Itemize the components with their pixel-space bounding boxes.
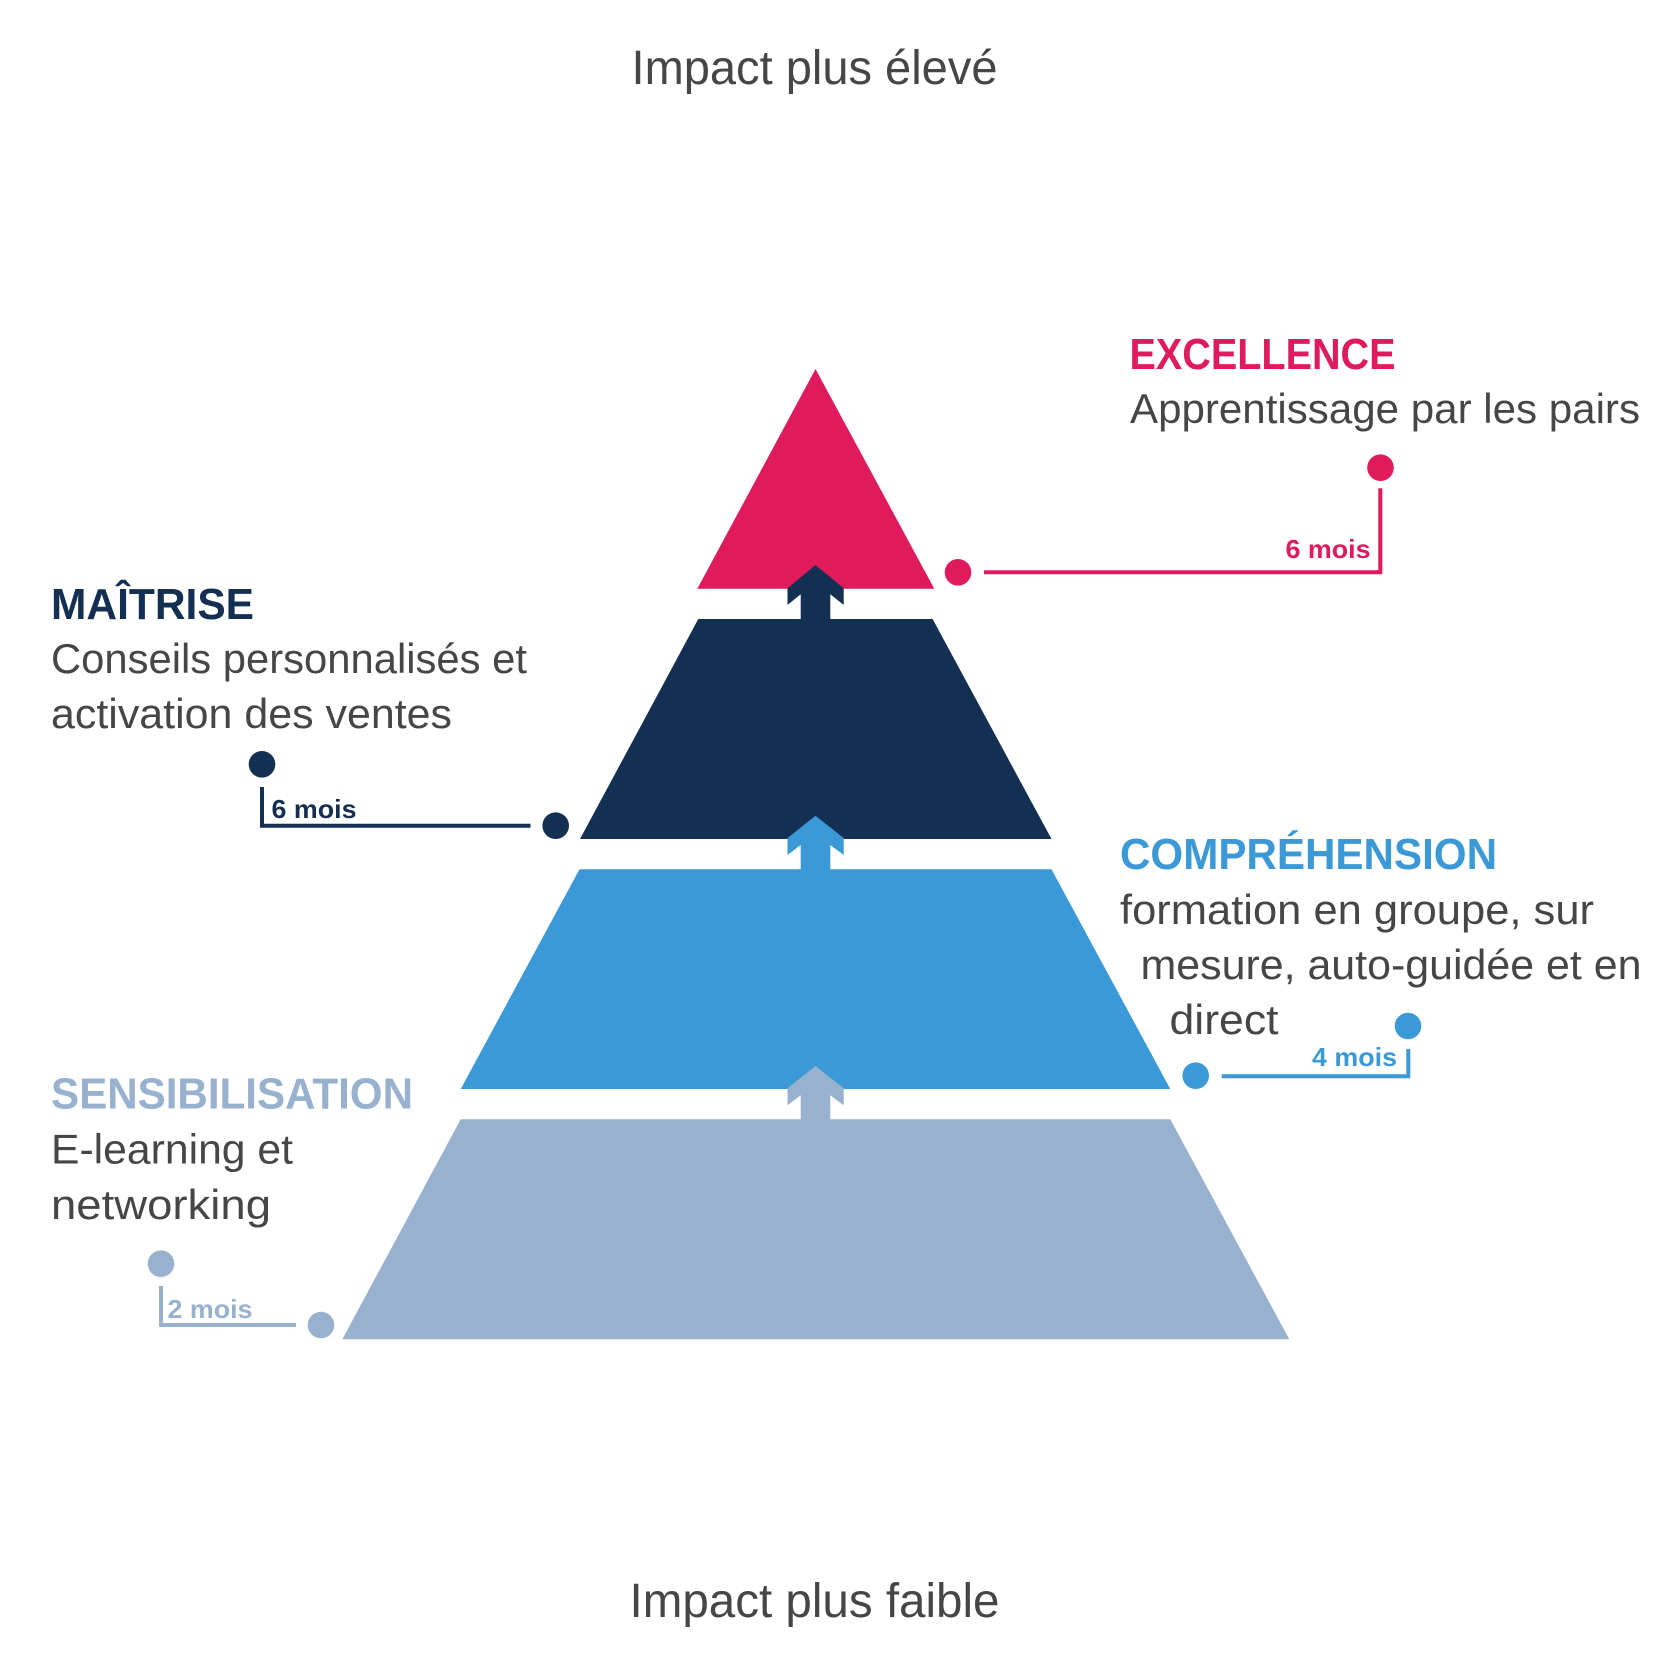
heading: lower impact: Impact plus faible [630, 1575, 1000, 1628]
heading: higher impact: Impact plus élevé [632, 42, 998, 95]
panel: compréhension [1120, 829, 1642, 1089]
text: compréhension description [1120, 886, 1642, 1043]
timeline: compréhension 4 mois [1182, 1013, 1421, 1089]
timeline: compréhension 4 mois: 4 mois [1312, 1042, 1397, 1072]
arrow: light blue [788, 1066, 844, 1120]
text: maîtrise description: Conseils personnalisés et [51, 635, 527, 682]
heading: excellence: EXCELLENCE [1130, 330, 1396, 379]
pyramid [342, 369, 1289, 1339]
text: maîtrise description: activation des ventes [51, 690, 452, 737]
timeline: maîtrise 6 mois [249, 751, 569, 839]
text: sensibilisation description [51, 1126, 293, 1228]
arrow: navy [788, 565, 844, 620]
timeline: maîtrise 6 mois: 6 mois [272, 794, 356, 824]
timeline: excellence 6 mois: 6 mois [1286, 534, 1370, 564]
timeline: excellence 6 mois [945, 454, 1394, 586]
heading: compréhension: COMPRÉHENSION [1120, 829, 1497, 879]
text: compréhension description: mesure, auto-guidée et en [1140, 941, 1642, 988]
tier: sensibilisation trapezoid [342, 1119, 1289, 1339]
panel: excellence [945, 330, 1640, 586]
tier: maîtrise trapezoid [580, 619, 1052, 839]
arrow: blue [788, 816, 844, 870]
heading: maîtrise: MAÎTRISE [51, 579, 254, 629]
panel: sensibilisation [51, 1070, 413, 1338]
text: compréhension description: direct [1170, 996, 1279, 1043]
text: sensibilisation description: E-learning et [51, 1126, 293, 1172]
tier: compréhension trapezoid [461, 869, 1170, 1089]
panel: maîtrise [51, 579, 569, 839]
timeline: sensibilisation 2 mois: 2 mois [168, 1294, 252, 1324]
timeline: sensibilisation 2 mois [148, 1250, 334, 1338]
text: compréhension description: formation en groupe, sur [1120, 886, 1594, 933]
text: excellence description: Apprentissage par les pairs [1130, 385, 1640, 432]
tier: excellence triangle [697, 369, 934, 589]
text: sensibilisation description: networking [51, 1181, 271, 1228]
text: maîtrise description [51, 635, 527, 737]
heading: sensibilisation: SENSIBILISATION [51, 1070, 413, 1118]
